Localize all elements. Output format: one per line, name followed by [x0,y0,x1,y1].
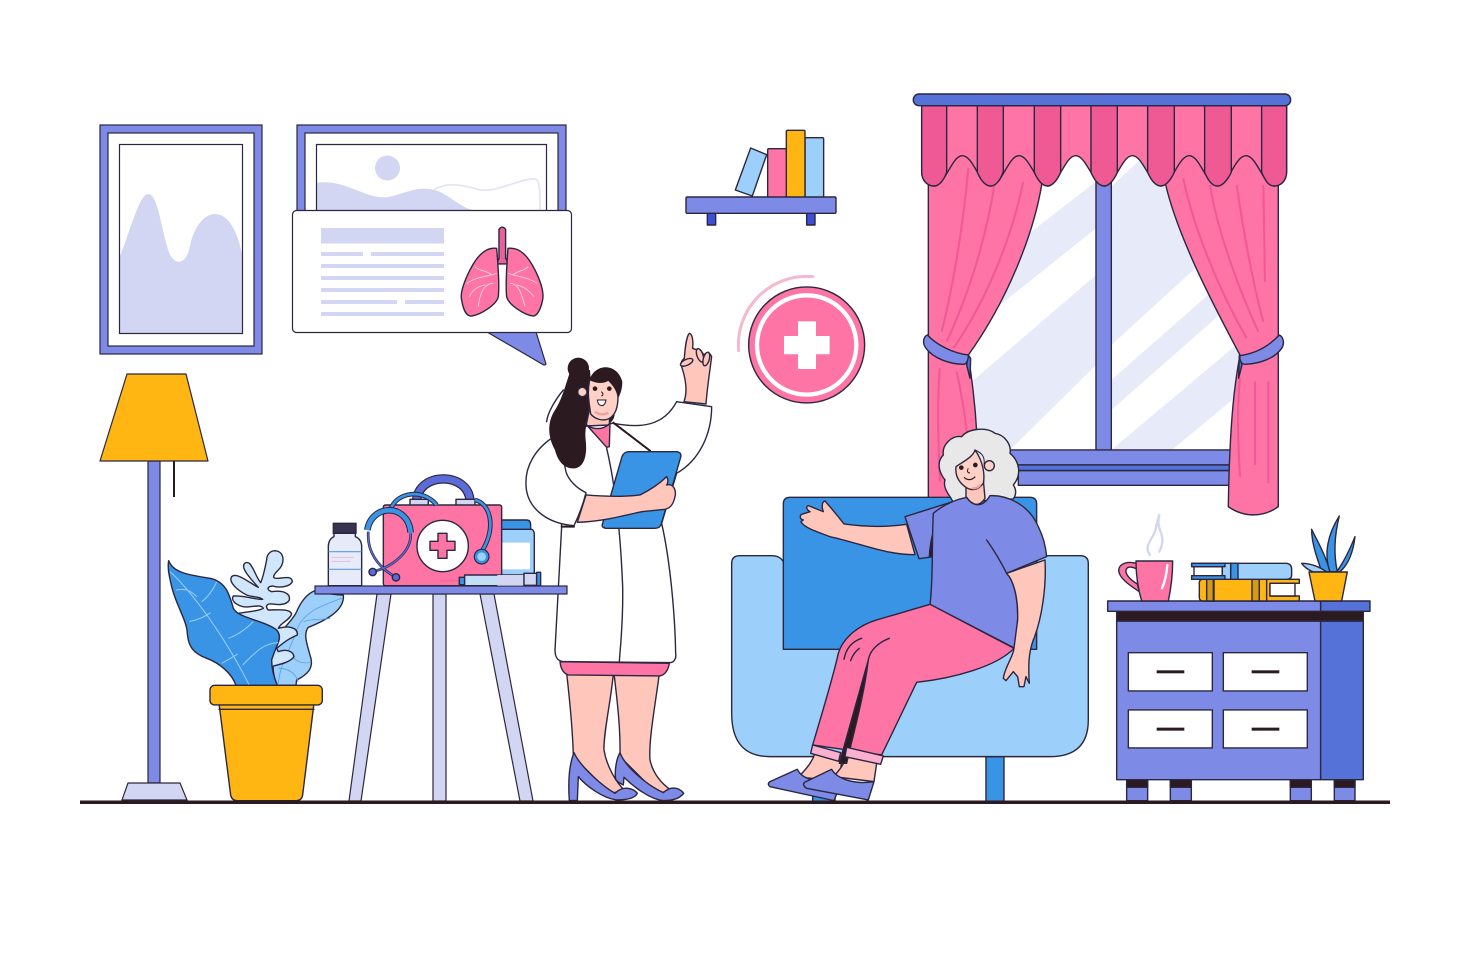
clipboard [602,452,681,528]
doctor shoes [569,753,684,801]
table top [315,586,567,594]
medicine jar [500,520,534,580]
shelf board [686,197,836,225]
chair base and arms [732,556,1088,757]
dresser [1108,515,1370,801]
small plant [1302,516,1355,601]
steaming mug [1119,515,1173,601]
window [913,94,1291,515]
patient shirt [905,496,1047,648]
drawers [1128,653,1307,748]
dark leaf [168,561,279,685]
speech bubble tail [487,332,546,365]
wall picture: mountains [100,125,262,354]
icon: lungs [461,227,543,316]
chair back cushion [783,497,1037,649]
doctor legs [567,673,672,793]
flower pot [210,685,322,801]
wall shelf with books [686,130,836,225]
side table [315,586,567,801]
patient left arm [800,501,915,555]
dresser body [1108,601,1370,780]
floor lamp [100,374,208,800]
syringe [440,572,541,586]
light leaf [273,591,343,685]
patient face [956,450,994,505]
lung information panel [292,210,572,332]
patient head [939,429,1019,505]
curtain rod [913,94,1291,106]
patient hair [939,429,1019,502]
stethoscope [367,494,490,581]
first aid case [383,479,502,586]
left curtain [924,148,1044,498]
table legs [349,594,533,801]
medicine bottle [328,523,362,586]
doctor [526,333,712,801]
lab coat [526,402,712,663]
books [735,130,824,197]
stacked books [1192,563,1299,601]
right curtain [1163,148,1283,515]
patient shoes [768,769,874,801]
patient trousers [811,604,1014,764]
valance [922,106,1287,186]
wall picture: landscape [297,125,566,215]
doctor skirt [560,662,669,676]
potted plant [168,551,343,801]
raised hand [679,333,712,404]
floor line [80,800,1390,804]
chair legs [813,757,1004,802]
neck and blouse [586,410,610,447]
window glass [968,152,1238,452]
window frame [1010,152,1233,485]
face [578,367,622,420]
icon: medical cross badge [738,276,865,403]
patient right arm [1003,560,1045,687]
arm holding clipboard [577,477,675,522]
hair back [547,358,615,468]
dresser feet [1127,780,1355,801]
armchair [732,497,1088,802]
patient ankles [798,753,877,782]
text placeholder lines [321,228,444,316]
back fern leaf [231,551,297,667]
patient [768,429,1047,801]
medical supplies on the table [328,479,541,586]
doctor head and hair [547,358,622,468]
